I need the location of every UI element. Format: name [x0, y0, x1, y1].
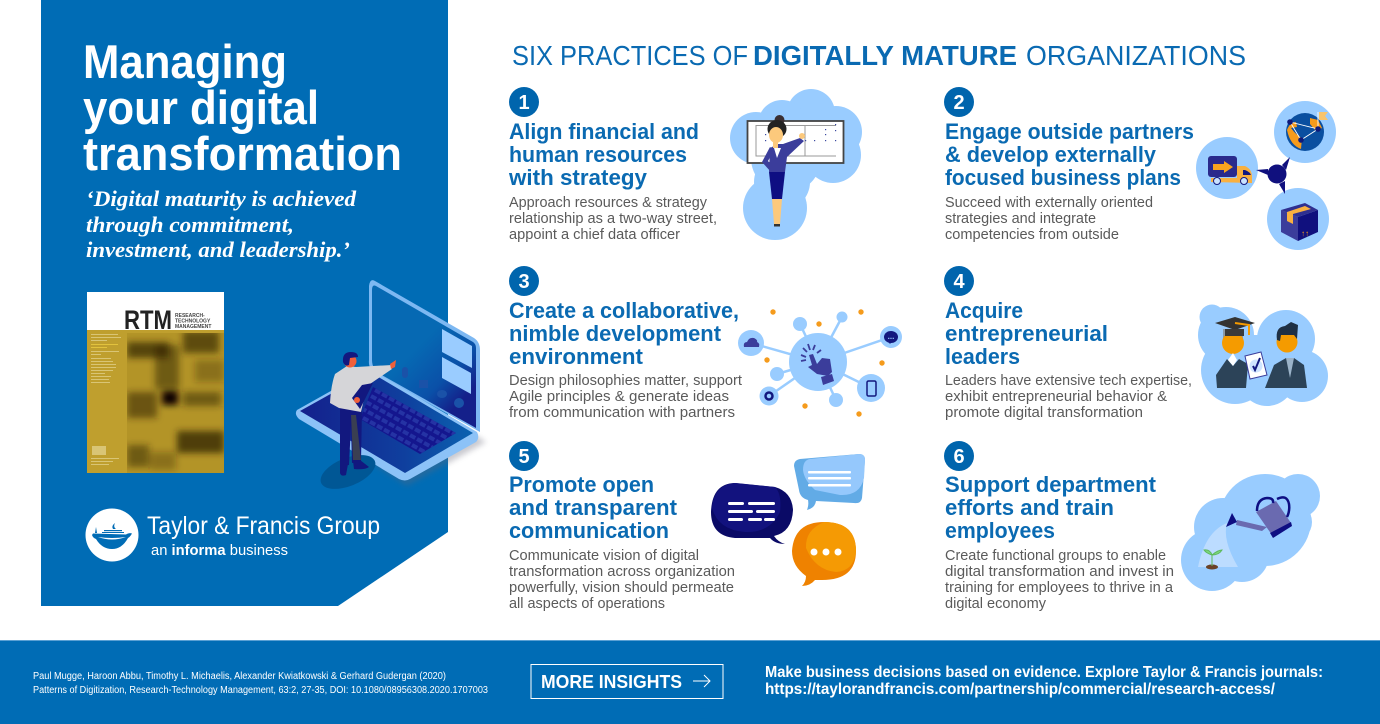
icon: lamp [92, 523, 132, 549]
logo: Taylor & Francis: Taylor & Francis Group [147, 512, 380, 540]
number 5: 5 [518, 446, 530, 468]
description 5: transformation across organization [509, 564, 735, 580]
laptop base [296, 369, 486, 486]
checklist [1245, 352, 1267, 379]
description 2: Succeed with externally oriented [945, 195, 1153, 211]
description 3: Agile principles & generate ideas [509, 389, 729, 405]
description 5: Communicate vision of digital [509, 548, 699, 564]
cover logo: RTM [124, 305, 172, 335]
button: more insights: MORE INSIGHTS [541, 672, 682, 692]
description 1: relationship as a two-way street, [509, 211, 717, 227]
heading 1 [508, 119, 699, 190]
number 4 [944, 266, 974, 296]
icon: chat: ... [888, 332, 894, 341]
number 3 [509, 266, 539, 296]
description 3 [509, 373, 742, 421]
icon: package box: ↑↑ [1301, 229, 1309, 238]
quote: through commitment, [86, 212, 294, 237]
journal cover: RESEARCH- [175, 313, 205, 319]
icon: delivery truck [1196, 137, 1258, 199]
icon: speech bubbles [711, 454, 865, 586]
heading 6 [945, 472, 1156, 543]
heading 5: communication [509, 518, 669, 543]
heading 3: nimble development [509, 321, 721, 346]
number 1 [509, 87, 539, 117]
practice 5 [509, 441, 865, 612]
icon: phone [867, 381, 876, 396]
heading 2: focused business plans [945, 165, 1181, 190]
heading 3: environment [509, 344, 643, 369]
icon: pointing hand [801, 344, 834, 385]
call to action: https://taylorandfrancis.com/partnership/commercial/research-access/ [765, 681, 1276, 698]
description 6: digital transformation and invest in [945, 564, 1174, 580]
icon: presenter at whiteboard [730, 89, 862, 240]
practice 2 [944, 87, 1336, 250]
arrow [693, 675, 710, 687]
description 1: appoint a chief data officer [509, 227, 680, 243]
description 4: Leaders have extensive tech expertise, [945, 373, 1192, 389]
journal cover: TECHNOLOGY [175, 318, 211, 324]
logo: Taylor & Francis [86, 508, 380, 562]
panel: left intro [41, 0, 486, 606]
footer band [0, 640, 1380, 724]
icon: cloud [744, 338, 759, 347]
icon: graduate and leader [1198, 304, 1328, 406]
main heading: DIGITALLY MATURE [753, 40, 1017, 71]
number 5 [509, 441, 539, 471]
description 6: digital economy [945, 596, 1047, 612]
description 2 [945, 195, 1153, 243]
icon: gear [766, 392, 772, 400]
practice 6 [944, 441, 1320, 612]
orange bubble [792, 522, 856, 586]
title: your digital [83, 81, 319, 134]
icon: central hub [1256, 157, 1290, 194]
description 2: strategies and integrate [945, 211, 1096, 227]
quote [86, 186, 357, 262]
heading 4 [945, 298, 1108, 369]
heading 5 [509, 472, 677, 543]
quote: ‘Digital maturity is achieved [86, 186, 357, 211]
description 5: all aspects of operations [509, 596, 665, 612]
description 4 [945, 373, 1192, 421]
main heading [512, 40, 1246, 71]
heading 2: & develop externally [945, 142, 1156, 167]
call to action [765, 664, 1323, 698]
number 6: 6 [953, 446, 965, 468]
icon: globe [1274, 101, 1336, 163]
navy bubble [711, 483, 793, 544]
description 5: powerfully, vision should permeate [509, 580, 734, 596]
description 6: Create functional groups to enable [945, 548, 1166, 564]
heading 4: Acquire [945, 298, 1023, 323]
icon: watering can [1181, 474, 1320, 591]
description 1: Approach resources & strategy [509, 195, 708, 211]
heading 1: human resources [509, 142, 687, 167]
heading 2 [945, 119, 1194, 190]
title [83, 35, 402, 180]
description 5 [509, 548, 735, 612]
number 6 [944, 441, 974, 471]
number 4: 4 [953, 271, 965, 293]
logo: Taylor & Francis: an informa business [151, 542, 288, 559]
main heading: ORGANIZATIONS [1026, 40, 1246, 71]
citation [33, 671, 488, 696]
icon: collaboration network [738, 309, 902, 417]
description 4: promote digital transformation [945, 405, 1143, 421]
description 2: competencies from outside [945, 227, 1119, 243]
heading 3 [509, 298, 739, 369]
button: more insights [531, 664, 723, 698]
citation: Paul Mugge, Haroon Abbu, Timothy L. Michaelis, Alexander Kwiatkowski & Gerhard Gudergan (2020) [33, 671, 446, 682]
quote: investment, and leadership.’ [86, 237, 350, 262]
title: Managing [83, 35, 287, 88]
laptop illustration [296, 280, 486, 496]
icon: package box [1267, 188, 1329, 250]
graduate figure [1215, 317, 1255, 388]
heading 5: Promote open [509, 472, 654, 497]
heading 4: leaders [945, 344, 1020, 369]
journal cover [87, 292, 224, 473]
description 4: exhibit entrepreneurial behavior & [945, 389, 1167, 405]
heading 5: and transparent [509, 495, 677, 520]
description 6 [945, 548, 1174, 612]
heading 1: Align financial and [509, 119, 699, 144]
practice 1 [508, 87, 862, 243]
heading 4: entrepreneurial [945, 321, 1108, 346]
number 1: 1 [518, 92, 530, 114]
heading 6: Support department [945, 472, 1156, 497]
description 3: from communication with partners [509, 405, 735, 421]
light blue bubble [794, 454, 865, 510]
title: transformation [83, 127, 402, 180]
main heading: SIX PRACTICES OF [512, 40, 748, 71]
citation: Patterns of Digitization, Research-Technology Management, 63:2, 27-35, DOI: 10.1080/08956308.2020.1707003 [33, 685, 488, 696]
heading 2: Engage outside partners [945, 119, 1194, 144]
heading 3: Create a collaborative, [509, 298, 739, 323]
description 1 [509, 195, 717, 243]
journal cover: MANAGEMENT [175, 324, 211, 330]
practice 3 [509, 266, 902, 421]
description 6: training for employees to thrive in a [945, 580, 1174, 596]
person presenting [316, 352, 396, 496]
heading 6: efforts and train [945, 495, 1114, 520]
icon: chat [884, 331, 898, 344]
heading 1: with strategy [508, 165, 647, 190]
practice 4 [944, 266, 1328, 421]
leader figure [1265, 322, 1307, 388]
laptop screen [369, 280, 480, 432]
icon: partners network [1196, 101, 1336, 250]
description 3: Design philosophies matter, support [509, 373, 742, 389]
heading 6: employees [945, 518, 1055, 543]
number 3: 3 [518, 271, 530, 293]
number 2: 2 [953, 92, 965, 114]
call to action: Make business decisions based on evidence. Explore Taylor & Francis journals: [765, 664, 1323, 681]
number 2 [944, 87, 974, 117]
